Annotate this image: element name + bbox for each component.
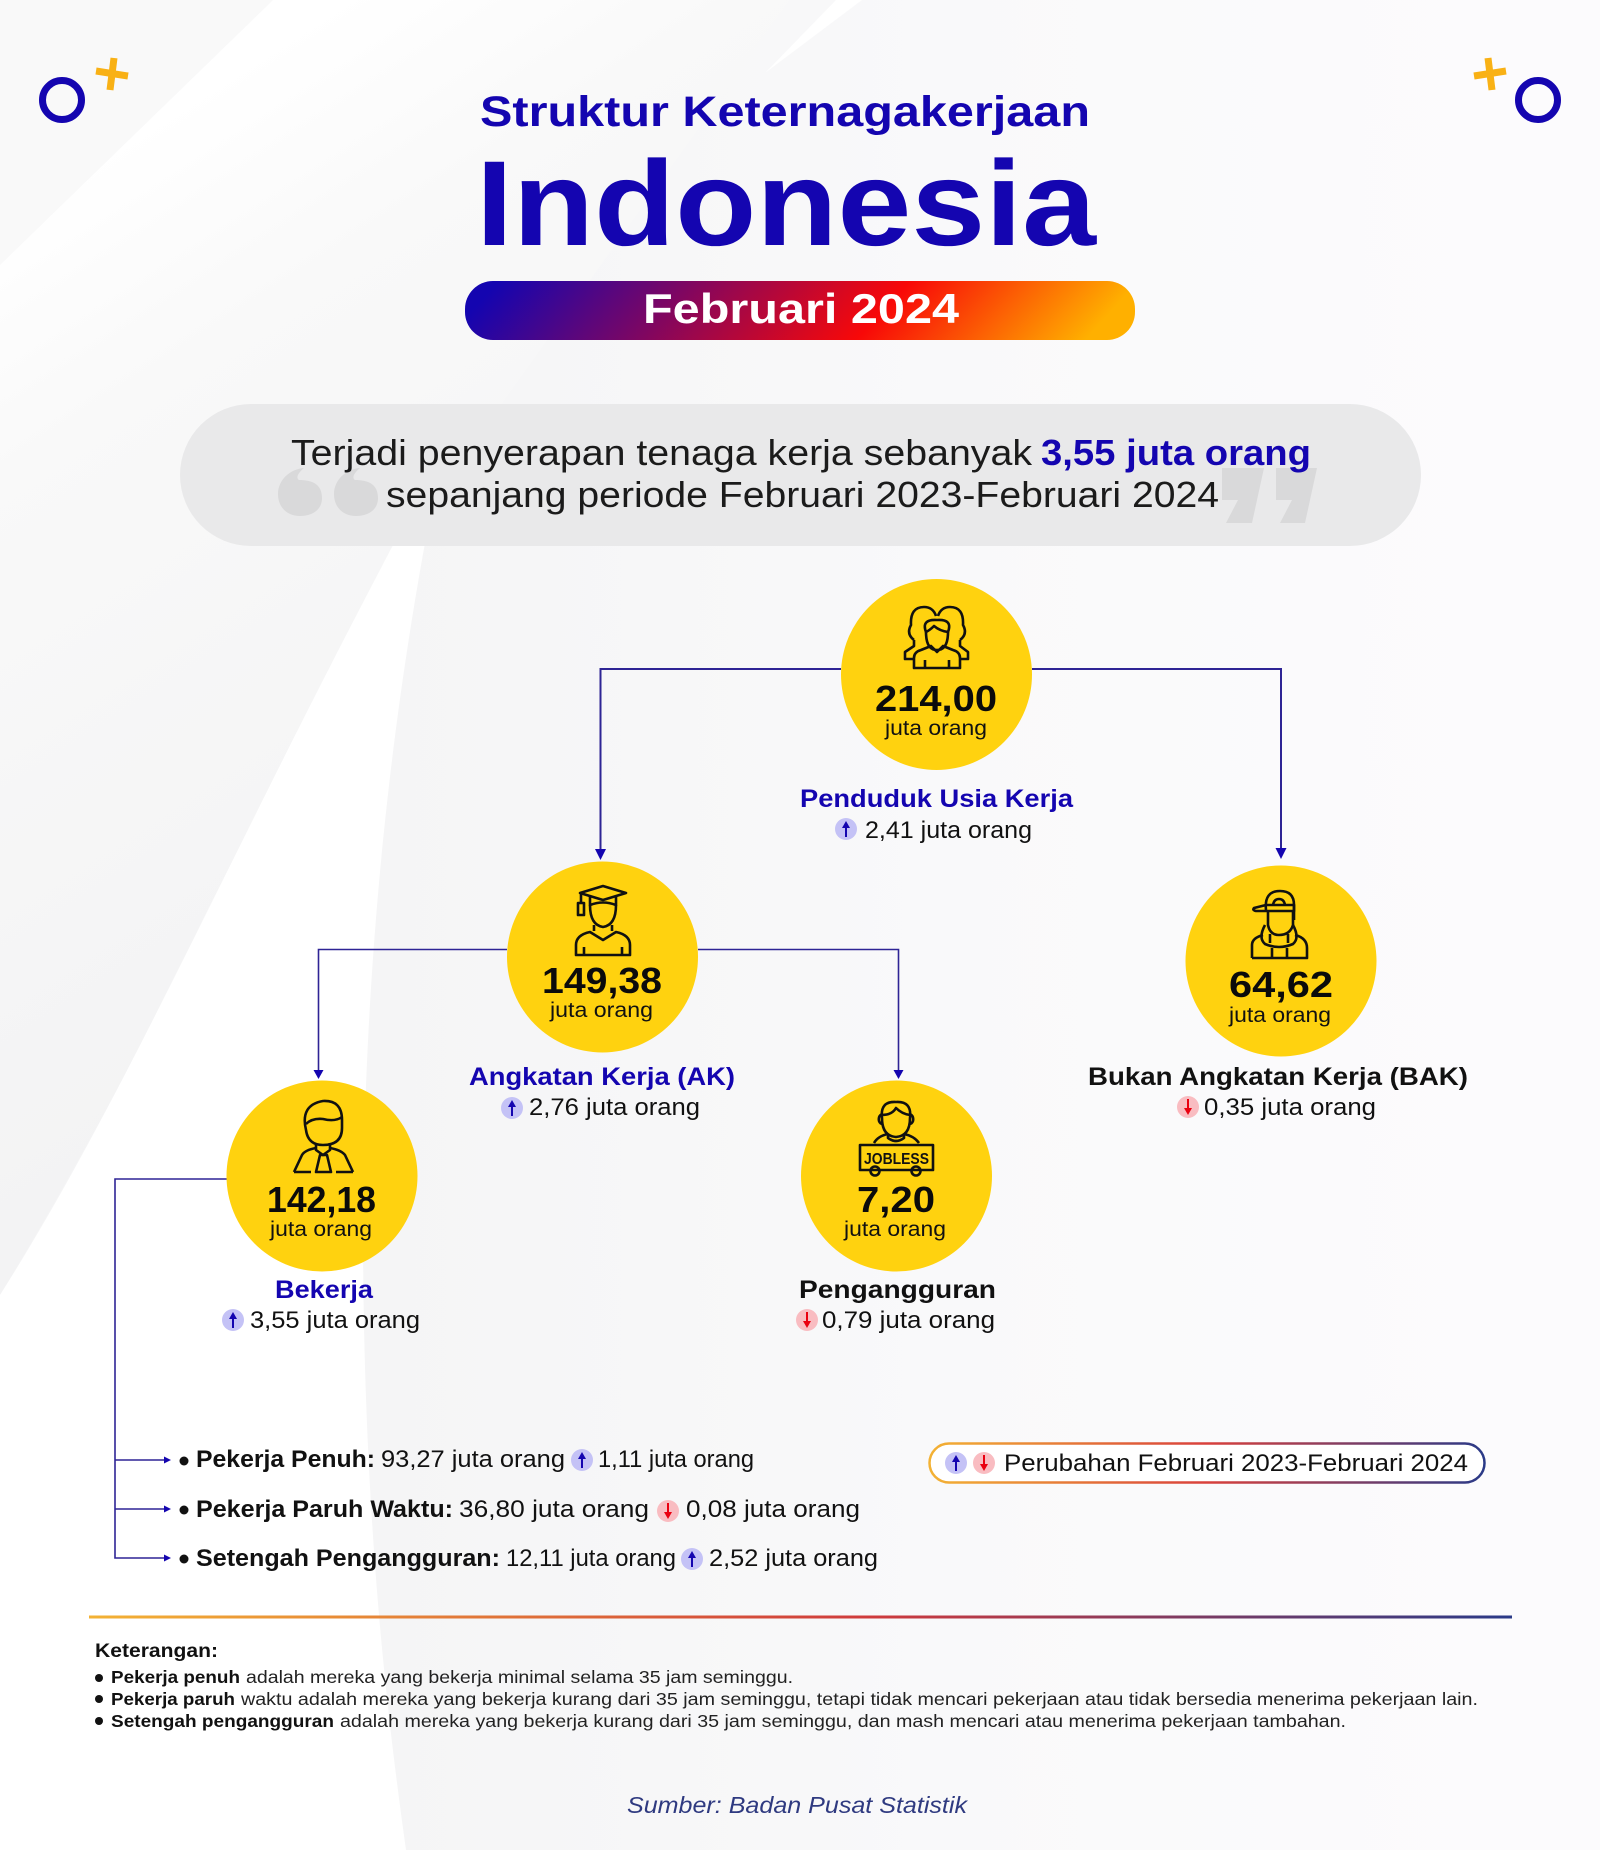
- quote text: sepanjang periode Februari 2023-Februari 2024: [386, 474, 1219, 515]
- quote text: [291, 432, 1311, 515]
- node: pengangguran: [796, 1080, 996, 1334]
- quote panel: [180, 404, 1421, 546]
- label: Bekerja: [275, 1276, 374, 1304]
- title: Indonesia: [476, 135, 1098, 271]
- icon: group of people: [905, 607, 968, 668]
- quote text: Terjadi penyerapan tenaga kerja sebanyak: [291, 432, 1033, 473]
- value: 149,38: [542, 960, 662, 1001]
- value: 142,18: [267, 1179, 376, 1220]
- connector: penduduk usia kerja to bukan angkatan kerja: [1032, 669, 1286, 859]
- date pill: Februari 2024: [643, 285, 960, 332]
- row: pekerja paruh waktu: 36,80 juta orang: [459, 1496, 649, 1523]
- row: pekerja paruh waktu: 0,08 juta orang: [686, 1496, 860, 1523]
- connector: angkatan kerja to pengangguran: [698, 950, 904, 1079]
- label: Pengangguran: [799, 1276, 996, 1304]
- legend: Perubahan Februari 2023-Februari 2024: [1004, 1450, 1468, 1477]
- row: pekerja penuh: Pekerja Penuh:: [196, 1446, 375, 1473]
- change: 0,79 juta orang: [822, 1307, 995, 1334]
- unit: juta orang: [843, 1218, 946, 1241]
- note: setengah pengangguran: Setengah pengangguran: [111, 1711, 334, 1731]
- value: 7,20: [857, 1179, 935, 1220]
- node: bukan angkatan kerja: [1088, 866, 1468, 1121]
- note: pekerja penuh: adalah mereka yang bekerja minimal selama 35 jam seminggu.: [246, 1667, 793, 1687]
- unit: juta orang: [269, 1218, 372, 1241]
- change: 2,76 juta orang: [529, 1094, 700, 1121]
- row: setengah pengangguran: 2,52 juta orang: [709, 1545, 878, 1572]
- node: penduduk usia kerja: [800, 579, 1074, 844]
- row: pekerja paruh waktu: [180, 1496, 860, 1523]
- note: pekerja paruh: Pekerja paruh: [111, 1689, 235, 1709]
- label: Penduduk Usia Kerja: [800, 785, 1074, 813]
- icon: person with jobless sign: [860, 1102, 933, 1176]
- row: pekerja penuh: 93,27 juta orang: [381, 1446, 565, 1473]
- note: setengah pengangguran: adalah mereka yang bekerja kurang dari 35 jam seminggu, dan mash mencari atau menerima pekerjaan tambahan.: [340, 1711, 1346, 1731]
- value: 64,62: [1229, 964, 1333, 1005]
- icon: closing quote mark: [1222, 468, 1317, 523]
- note: pekerja paruh: waktu adalah mereka yang bekerja kurang dari 35 jam seminggu, tetapi tidak mencari pekerjaan atau tidak bersedia menerima pekerjaan lain.: [240, 1689, 1478, 1709]
- legend: [930, 1444, 1484, 1482]
- change: 2,41 juta orang: [865, 817, 1032, 844]
- divider: [89, 1616, 1512, 1618]
- icon: person with jobless sign: JOBLESS: [864, 1151, 929, 1168]
- row: pekerja paruh waktu: Pekerja Paruh Waktu:: [196, 1496, 453, 1523]
- list: worker types: [180, 1446, 878, 1572]
- change: 3,55 juta orang: [250, 1307, 420, 1334]
- icon: youth with cap: [1252, 891, 1307, 958]
- title: Struktur Keternagakerjaan: [480, 88, 1090, 136]
- connector: bekerja to worker types: [115, 1179, 227, 1562]
- icon: worker with tie: [294, 1101, 353, 1172]
- date pill: [465, 281, 1135, 340]
- row: pekerja penuh: [180, 1446, 754, 1473]
- unit: juta orang: [884, 717, 987, 740]
- notes: [95, 1641, 1478, 1731]
- value: 214,00: [875, 678, 997, 719]
- row: setengah pengangguran: Setengah Pengangguran:: [196, 1545, 500, 1572]
- icon: opening quote mark: [278, 468, 378, 516]
- decoration: top right circle and plus: [1474, 58, 1558, 120]
- notes heading: Keterangan:: [95, 1641, 218, 1662]
- row: setengah pengangguran: [180, 1545, 878, 1572]
- connector: penduduk usia kerja to angkatan kerja: [595, 669, 841, 860]
- label: Bukan Angkatan Kerja (BAK): [1088, 1063, 1468, 1091]
- quote text: 3,55 juta orang: [1041, 432, 1311, 473]
- icon: graduate: [576, 886, 630, 955]
- unit: juta orang: [1228, 1004, 1331, 1027]
- label: Angkatan Kerja (AK): [469, 1063, 735, 1091]
- change: 0,35 juta orang: [1204, 1094, 1376, 1121]
- source: Sumber: Badan Pusat Statistik: [627, 1792, 969, 1818]
- row: pekerja penuh: 1,11 juta orang: [598, 1446, 754, 1473]
- row: setengah pengangguran: 12,11 juta orang: [506, 1545, 676, 1572]
- unit: juta orang: [549, 999, 653, 1022]
- node: bekerja: [222, 1080, 420, 1334]
- decoration: top left circle and plus: [42, 58, 128, 120]
- note: pekerja penuh: Pekerja penuh: [111, 1667, 240, 1687]
- connector: angkatan kerja to bekerja: [314, 950, 507, 1079]
- title: [476, 88, 1098, 271]
- node: angkatan kerja: [469, 862, 735, 1121]
